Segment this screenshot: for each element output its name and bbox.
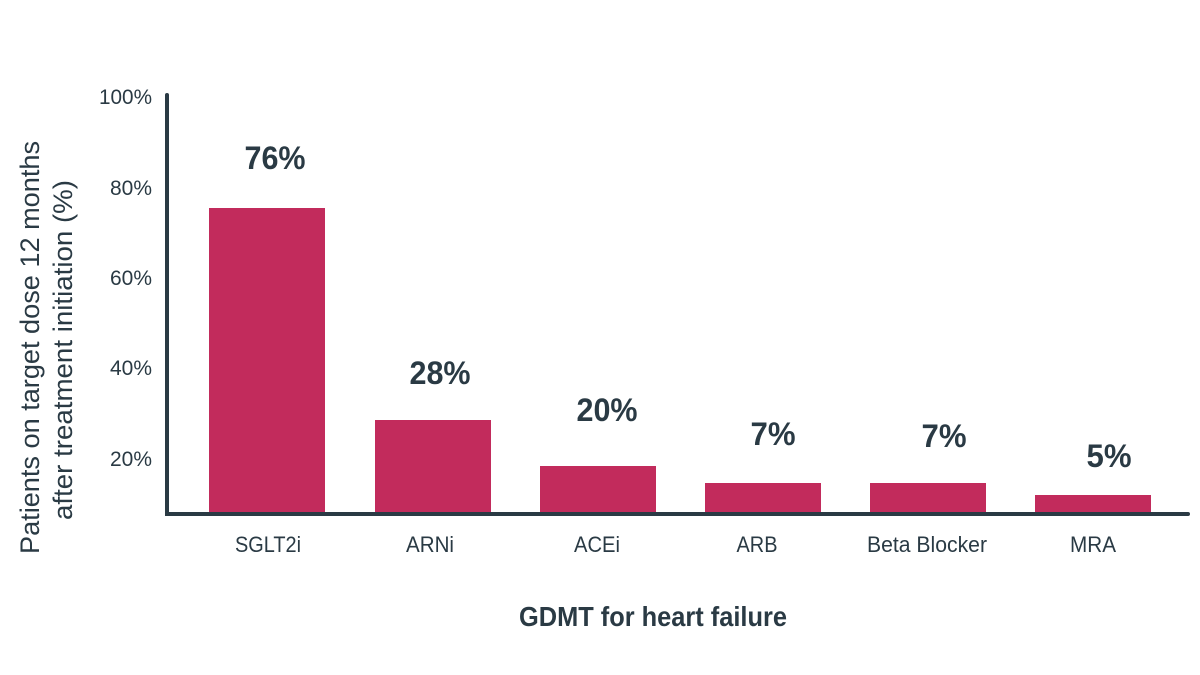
category labels: ARB bbox=[736, 532, 778, 557]
category labels: ARNi bbox=[406, 532, 454, 557]
bar: SGLT2i bbox=[209, 208, 325, 513]
bars bbox=[209, 208, 1151, 513]
category labels: ACEi bbox=[574, 532, 620, 557]
y-axis title bbox=[15, 141, 78, 554]
y-axis title: after treatment initiation (%) bbox=[48, 180, 78, 520]
bar: MRA bbox=[1035, 495, 1151, 513]
value labels: 20% bbox=[576, 392, 638, 428]
category labels bbox=[235, 532, 1116, 557]
value labels: 76% bbox=[244, 140, 306, 176]
bar: Beta Blocker bbox=[870, 483, 986, 513]
bar: ARNi bbox=[375, 420, 491, 513]
y-axis tick labels: 100% bbox=[99, 85, 152, 109]
y-axis tick labels: 40% bbox=[110, 356, 152, 380]
category labels: Beta Blocker bbox=[867, 532, 987, 557]
bar: ACEi bbox=[540, 466, 656, 513]
value labels bbox=[244, 140, 1132, 474]
value labels: 5% bbox=[1086, 438, 1132, 474]
y-axis tick labels: 60% bbox=[110, 266, 152, 290]
y-axis title: Patients on target dose 12 months bbox=[15, 141, 45, 554]
axes bbox=[167, 95, 1188, 514]
value labels: 7% bbox=[922, 418, 966, 454]
bar: ARB bbox=[705, 483, 821, 513]
category labels: SGLT2i bbox=[235, 532, 301, 557]
y-axis tick labels: 20% bbox=[110, 447, 152, 471]
y-axis tick labels: 80% bbox=[110, 176, 152, 200]
y-axis tick labels bbox=[99, 85, 152, 471]
value labels: 7% bbox=[750, 416, 796, 452]
value labels: 28% bbox=[410, 355, 470, 391]
x-axis title: GDMT for heart failure bbox=[519, 601, 787, 632]
category labels: MRA bbox=[1070, 532, 1116, 557]
